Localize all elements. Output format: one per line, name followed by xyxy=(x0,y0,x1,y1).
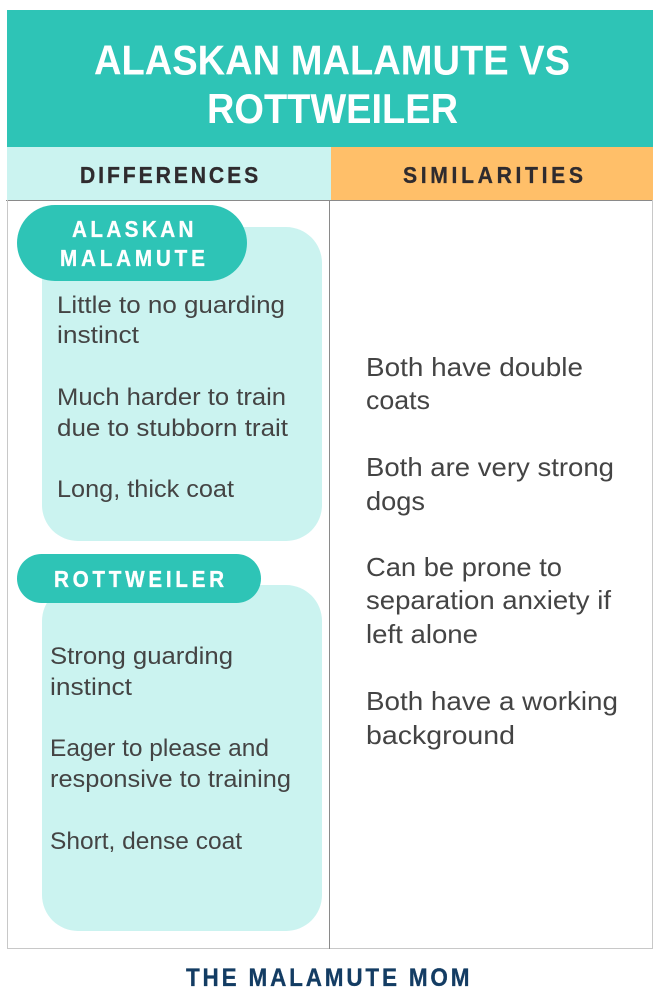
pill heading: alaskan malamute xyxy=(17,205,247,281)
text block: similarities list: separation anxiety if xyxy=(366,585,612,615)
column heading: differences: DIFFERENCES xyxy=(80,162,258,188)
text block: similarities list: Can be prone to xyxy=(366,552,562,582)
pill heading: alaskan malamute: ALASKAN xyxy=(72,216,194,242)
column heading: similarities xyxy=(331,147,653,200)
title banner: ROTTWEILER xyxy=(207,85,458,132)
table frame xyxy=(6,200,653,949)
text block: malamute traits: Long, thick coat xyxy=(57,476,234,503)
panel background xyxy=(42,227,322,541)
text block: malamute traits xyxy=(57,292,288,503)
title banner: ALASKAN MALAMUTE VS xyxy=(94,36,570,84)
text block: malamute traits: Much harder to train xyxy=(57,384,286,411)
text block: rottweiler traits: responsive to training xyxy=(50,766,291,793)
text block: similarities list: Both have double xyxy=(366,352,583,382)
pill heading: rottweiler xyxy=(17,554,261,603)
text block: similarities list: Both have a working xyxy=(366,686,618,716)
panel background xyxy=(42,585,322,931)
column heading: similarities: SIMILARITIES xyxy=(403,162,583,188)
pill heading: rottweiler: ROTTWEILER xyxy=(54,566,224,592)
panel: alaskan malamute differences xyxy=(17,205,322,541)
text block: malamute traits: due to stubborn trait xyxy=(57,415,288,442)
text block: similarities list: background xyxy=(366,720,515,750)
title banner xyxy=(7,10,653,147)
panel: rottweiler differences xyxy=(17,554,322,931)
text block: rottweiler traits: instinct xyxy=(50,674,132,701)
text block: similarities list xyxy=(366,352,618,750)
text block: rottweiler traits: Strong guarding xyxy=(50,643,233,670)
text block: rottweiler traits: Short, dense coat xyxy=(50,828,242,855)
column heading: differences xyxy=(7,147,331,200)
footer credit: THE MALAMUTE MOM xyxy=(186,964,470,992)
text block: malamute traits: instinct xyxy=(57,322,139,349)
text block: malamute traits: Little to no guarding xyxy=(57,292,285,319)
text block: similarities list: Both are very strong xyxy=(366,452,614,482)
pill heading: alaskan malamute: MALAMUTE xyxy=(60,245,205,271)
text block: rottweiler traits: Eager to please and xyxy=(50,735,269,762)
text block: similarities list: left alone xyxy=(366,619,478,649)
text block: similarities list: coats xyxy=(366,385,430,415)
text block: similarities list: dogs xyxy=(366,486,425,516)
text block: rottweiler traits xyxy=(50,643,291,855)
